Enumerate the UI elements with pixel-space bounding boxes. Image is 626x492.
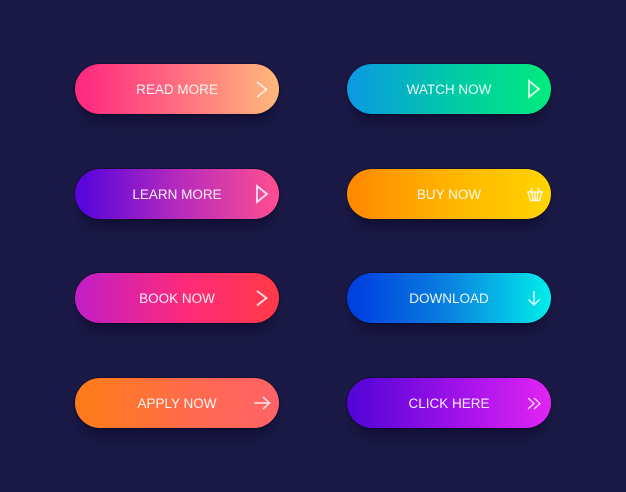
button: read more xyxy=(75,64,279,114)
button: book now xyxy=(75,273,279,323)
label: apply now: APPLY NOW xyxy=(137,396,217,411)
label: read more: READ MORE xyxy=(136,82,218,97)
label: buy now: BUY NOW xyxy=(417,186,481,202)
button: learn more xyxy=(75,168,279,218)
icon: chevron right xyxy=(256,290,268,306)
label: download: DOWNLOAD xyxy=(409,291,489,306)
label: click here: CLICK HERE xyxy=(408,396,490,411)
button: apply now xyxy=(75,378,279,428)
icon: play outline xyxy=(256,184,268,204)
button: download xyxy=(347,273,551,323)
icon: chevron right xyxy=(256,82,268,98)
label: book now: BOOK NOW xyxy=(139,291,215,306)
button: buy now xyxy=(347,168,551,218)
icon: play outline xyxy=(528,79,540,99)
button: watch now xyxy=(347,64,551,114)
icon: double chevron right xyxy=(528,398,541,410)
icon: arrow down xyxy=(528,291,540,306)
icon: shopping basket xyxy=(527,188,543,202)
button: click here xyxy=(347,378,551,428)
icon: arrow right xyxy=(254,396,270,410)
label: learn more: LEARN MORE xyxy=(132,186,222,202)
label: watch now: WATCH NOW xyxy=(407,82,491,97)
